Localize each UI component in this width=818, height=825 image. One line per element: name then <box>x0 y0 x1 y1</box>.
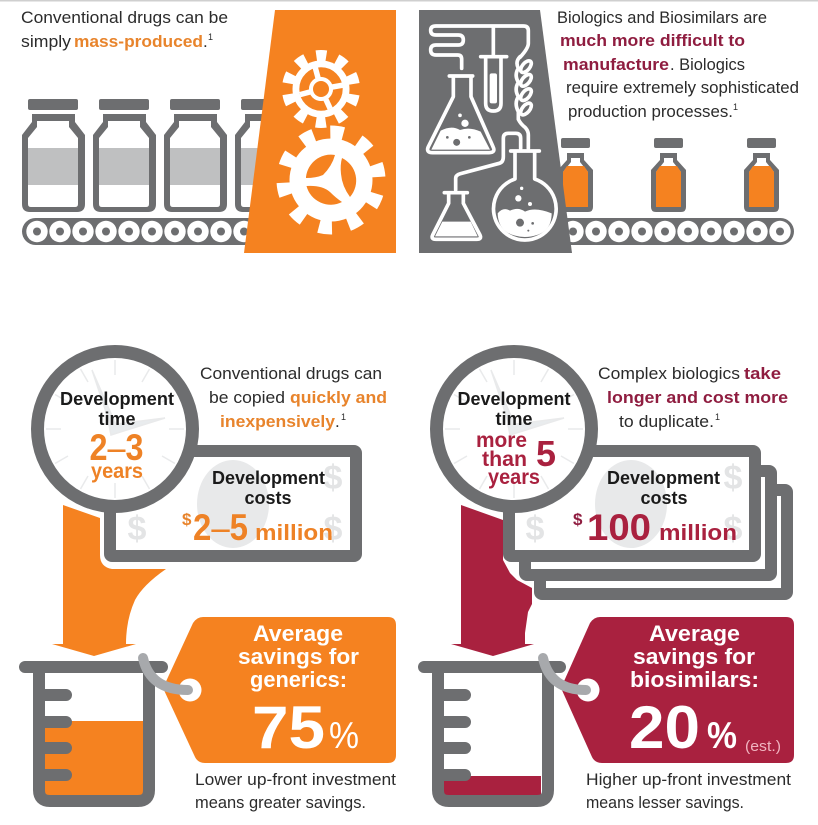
panel: generics development <box>38 352 387 656</box>
text: higher investment <box>586 770 791 812</box>
price tag: biosimilars savings <box>561 617 794 763</box>
money card: front: costs <box>640 488 688 508</box>
clock: development time: time <box>98 409 136 429</box>
icon: test tube <box>481 57 507 111</box>
price tag: generics savings <box>163 617 396 763</box>
price tag: generics savings: 75 <box>252 694 325 761</box>
heading: conventional drugs mass-produced: Conventional drugs can be <box>21 8 228 27</box>
panel: biosimilars savings <box>418 617 794 812</box>
icon: large gear <box>270 119 392 241</box>
text: lower investment: Lower up-front investment <box>195 770 396 789</box>
text: copied quickly and inexpensively: quickly and <box>290 388 387 407</box>
text: copied quickly and inexpensively: inexpensively <box>220 412 336 431</box>
price tag: generics savings: generics: <box>250 667 347 692</box>
money card: development costs: $ <box>324 510 343 548</box>
clock: development time: 2–3 <box>90 427 144 468</box>
conveyor belt: left <box>22 218 272 245</box>
money card: front: 100 <box>587 507 651 548</box>
icon: condenser tubing <box>431 26 528 68</box>
price tag: generics savings: savings for <box>238 644 359 669</box>
money card: development costs: $ <box>128 510 147 548</box>
icon: orange machine with gears <box>244 10 396 253</box>
icon: beaker filled to 75% <box>19 661 168 801</box>
text: take longer and cost more <box>598 364 788 431</box>
text: copied quickly and inexpensively: Conventional drugs can <box>200 364 382 383</box>
text: take longer and cost more: Complex biologics <box>598 364 740 383</box>
heading: biologics difficult to manufacture: production processes. <box>568 102 733 121</box>
heading: biologics difficult to manufacture: . Biologics <box>670 55 745 74</box>
text: take longer and cost more: take <box>744 364 781 383</box>
price tag: biosimilars savings: savings for <box>633 644 755 669</box>
tag hole and string <box>543 658 600 702</box>
text: higher investment: Higher up-front investment <box>586 770 791 789</box>
clock: development time: 5 <box>536 433 556 474</box>
icon: gray lab panel with flasks <box>419 10 572 253</box>
price tag: biosimilars savings: % <box>707 715 737 756</box>
text: copied quickly and inexpensively: be copied <box>209 388 285 407</box>
heading: conventional drugs mass-produced: . <box>203 32 208 51</box>
text: lower investment: means greater savings. <box>195 793 366 812</box>
clock: development time: more <box>476 429 527 452</box>
heading: conventional drugs mass-produced: simply <box>21 32 72 51</box>
heading: conventional drugs mass-produced <box>21 8 228 51</box>
money card: back <box>540 490 787 594</box>
heading: biologics difficult to manufacture <box>557 8 799 121</box>
heading: biologics difficult to manufacture: 1 <box>733 102 738 112</box>
money card: front: million <box>659 520 737 545</box>
tag hole and string <box>143 658 202 702</box>
price tag: biosimilars savings: Average <box>649 621 740 646</box>
money card: middle <box>525 471 771 575</box>
panel: biosimilars development <box>436 352 788 656</box>
money card: development costs: $ <box>182 510 192 529</box>
money card: development costs: 2–5 <box>193 507 248 548</box>
clock: development time: time <box>495 409 533 429</box>
text: lower investment <box>195 770 396 812</box>
price tag: biosimilars savings: biosimilars: <box>630 667 759 692</box>
money card: front <box>509 451 755 556</box>
clock: development time <box>38 352 192 506</box>
icon: small gear <box>282 50 360 128</box>
money card: front: $ <box>526 510 545 548</box>
arrow: orange down to beaker <box>52 505 166 656</box>
money stack: development costs <box>509 451 787 594</box>
text: higher investment: means lesser savings. <box>586 793 744 812</box>
icon: beaker filled to 20% <box>418 661 566 801</box>
clock: development time: years <box>488 466 540 489</box>
heading: conventional drugs mass-produced: 1 <box>208 32 213 42</box>
money card: front: $ <box>573 510 583 529</box>
heading: biologics difficult to manufacture: Biologics and Biosimilars are <box>557 8 767 27</box>
panel: conventional manufacturing <box>21 8 396 253</box>
arrow: crimson down to beaker <box>451 505 534 656</box>
price tag: biosimilars savings: 20 <box>629 694 700 761</box>
text: take longer and cost more: to duplicate. <box>619 412 714 431</box>
price tag: generics savings: % <box>329 715 359 756</box>
text: copied quickly and inexpensively: . <box>335 412 340 431</box>
price tag: biosimilars savings: (est.) <box>745 738 781 755</box>
price tag: generics savings: Average <box>253 621 343 646</box>
clock: development time: Development <box>458 389 571 409</box>
icon: bottles in a row <box>22 99 298 212</box>
icon: orange vials <box>558 138 779 212</box>
money card: front: $ <box>724 459 743 497</box>
clock: development time <box>436 352 592 506</box>
icon: conical flask <box>428 76 494 153</box>
heading: biologics difficult to manufacture: require extremely sophisticated <box>566 78 799 97</box>
text: copied quickly and inexpensively <box>200 364 387 431</box>
text: take longer and cost more: longer and cost more <box>607 388 788 407</box>
icon: connecting tube and small flask <box>432 133 521 239</box>
heading: conventional drugs mass-produced: mass-produced <box>74 32 203 51</box>
conveyor belt: right <box>540 218 794 245</box>
money card: front: Development <box>607 468 720 488</box>
icon: coil <box>516 57 533 148</box>
clock: development time: years <box>91 460 143 483</box>
money card: development costs: $ <box>324 459 343 497</box>
heading: biologics difficult to manufacture: much more difficult to <box>560 31 745 50</box>
panel: generics savings <box>19 617 396 812</box>
money card: front: $ <box>724 510 743 548</box>
clock: development time: than <box>482 448 527 471</box>
clock: development time: Development <box>60 389 174 409</box>
text: take longer and cost more: 1 <box>715 412 720 422</box>
icon: round flask <box>493 151 556 240</box>
money card: development costs: million <box>255 520 333 545</box>
money card: development costs: Development <box>212 468 325 488</box>
heading: biologics difficult to manufacture: manufacture <box>563 55 669 74</box>
money card: development costs <box>110 451 356 556</box>
money card: development costs: costs <box>244 488 292 508</box>
text: copied quickly and inexpensively: 1 <box>341 412 346 422</box>
panel: biologics manufacturing <box>419 8 799 253</box>
